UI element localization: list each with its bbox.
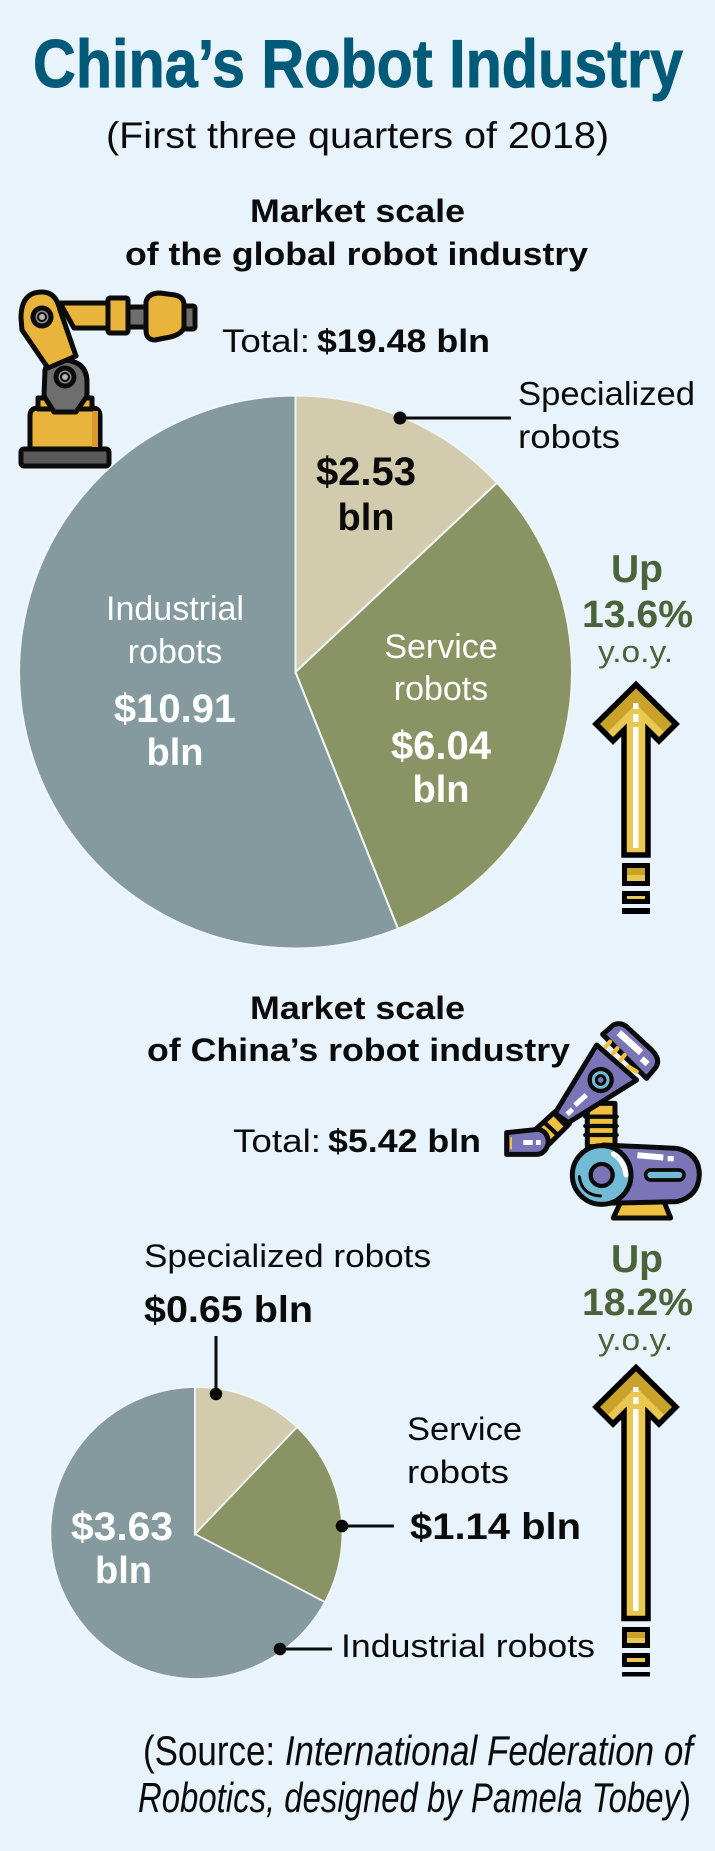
icon: purple robot arm: [507, 1024, 699, 1218]
China growth callout: y.o.y.: [598, 1322, 673, 1357]
global service robots label: bln: [413, 769, 469, 811]
China service robots label: $1.14 bln: [410, 1506, 581, 1547]
slice: industrial robots: [19, 396, 398, 948]
global service robots label: $6.04: [391, 724, 492, 768]
global growth callout: [582, 548, 693, 669]
global specialized robots label: [394, 375, 695, 455]
pie chart: global robot industry: [19, 396, 572, 948]
global specialized robots label: robots: [518, 418, 620, 455]
global total: Total:: [222, 323, 310, 359]
slice: specialized robots: [296, 396, 497, 672]
China specialized robots label: [144, 1238, 431, 1400]
icon: yellow industrial robot arm: [21, 292, 195, 466]
global industrial robots label: [106, 590, 244, 774]
global industrial robots label: Industrial: [106, 590, 244, 628]
robot pedestal: [613, 1200, 671, 1218]
robot body capsule: [603, 1145, 699, 1203]
global industrial robots label: robots: [128, 633, 222, 671]
China growth callout: [582, 1238, 693, 1357]
robot gray joint: [44, 360, 87, 412]
China industrial value: [71, 1505, 173, 1592]
robot neck spring: [587, 1103, 615, 1147]
China industrial value: bln: [95, 1550, 152, 1592]
subtitle: (First three quarters of 2018): [106, 115, 609, 156]
China growth callout: 18.2%: [582, 1282, 693, 1324]
robot base body: [30, 408, 100, 449]
global service robots label: robots: [394, 670, 488, 708]
China industrial robots label: Industrial robots: [341, 1628, 595, 1664]
global growth callout: Up: [611, 548, 663, 591]
source note: [138, 1727, 697, 1821]
China service robots label: robots: [407, 1454, 509, 1490]
China total: $5.42 bln: [328, 1123, 481, 1159]
robot teal disc: [572, 1146, 631, 1204]
global service robots label: [384, 628, 498, 811]
China total: Total:: [233, 1123, 321, 1159]
global total: $19.48 bln: [317, 323, 490, 359]
icon: global growth arrow: [596, 684, 676, 914]
China total: [233, 1123, 481, 1159]
robot arm body: [555, 1045, 637, 1123]
slice: service robots: [296, 483, 572, 929]
slice: service robots: [195, 1427, 342, 1602]
China growth callout: Up: [611, 1238, 663, 1281]
China service robots label: [336, 1411, 581, 1547]
heading: global market scale: Market scale: [250, 193, 465, 229]
robot forearm: [535, 1112, 569, 1145]
global growth callout: y.o.y.: [598, 634, 673, 669]
heading: China market scale: Market scale: [250, 990, 465, 1026]
global specialized value: $2.53: [316, 450, 416, 494]
global industrial robots label: bln: [147, 732, 203, 774]
China specialized robots label: Specialized robots: [144, 1238, 431, 1274]
heading: global market scale: of the global robot industry: [125, 236, 588, 272]
China industrial value: $3.63: [71, 1505, 173, 1549]
robot base plate: [21, 449, 109, 466]
heading: China market scale: of China’s robot industry: [147, 1032, 570, 1068]
heading: China market scale: [147, 990, 570, 1068]
global specialized value: bln: [338, 497, 394, 539]
global service robots label: Service: [384, 628, 498, 666]
robot hand: [507, 1129, 548, 1154]
robot upper arm: [21, 292, 76, 368]
global industrial robots label: $10.91: [114, 687, 236, 731]
China specialized robots label: $0.65 bln: [144, 1289, 313, 1330]
slice: specialized robots: [195, 1387, 297, 1534]
China service robots label: Service: [407, 1411, 522, 1447]
heading: global market scale: [125, 193, 588, 272]
slice: industrial robots: [50, 1387, 325, 1679]
icon: China growth arrow: [596, 1368, 676, 1676]
global growth callout: 13.6%: [582, 594, 693, 636]
robot horizontal arm: [60, 303, 110, 328]
pie chart: China robot industry: [50, 1387, 342, 1679]
global total: [222, 323, 490, 359]
robot hand: [146, 293, 184, 340]
global specialized value: [316, 450, 416, 539]
global specialized robots label: Specialized: [518, 375, 695, 412]
robot head cap: [603, 1024, 658, 1078]
